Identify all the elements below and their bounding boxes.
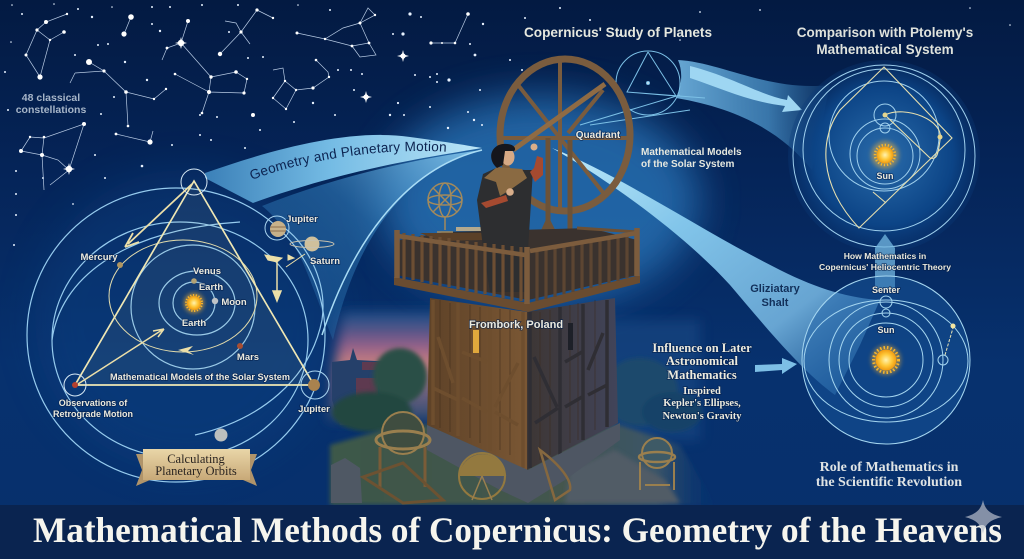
planet Jupiter lower right (308, 379, 320, 391)
planet Mercury (117, 262, 123, 268)
text: influence on later mathematics: Mathematics (667, 368, 737, 382)
armillary left (363, 412, 443, 503)
label retrograde: Retrograde Motion (53, 409, 133, 419)
tower right wall (527, 298, 618, 470)
heading: Copernicus' Study of Planets: Copernicus' Study of Planets (524, 25, 712, 40)
label: Quadrant: Quadrant (576, 130, 621, 141)
sun (871, 141, 899, 169)
label models: Mathematical Models of the Solar System (110, 372, 290, 382)
arrow downward (273, 262, 281, 301)
balcony platform (394, 275, 640, 312)
small star planet (950, 324, 956, 328)
diagram: role of mathematics (802, 276, 970, 444)
disc glow (788, 60, 980, 252)
small geometry circle near top (580, 51, 705, 125)
text: inspired Kepler and Newton: Inspired (683, 386, 721, 397)
heading: role of mathematics: the Scientific Revolution (816, 475, 962, 490)
collar (484, 167, 527, 196)
robe (477, 168, 533, 292)
beam: wide fan to left diagram (262, 150, 482, 340)
brass quadrant (459, 453, 505, 500)
label Mercury: Mercury (81, 252, 118, 263)
gravel path (565, 450, 680, 503)
astronomer figure (477, 144, 543, 292)
vertex ring right (301, 371, 329, 399)
triangle (75, 181, 314, 385)
sparkle icon (965, 500, 1002, 534)
tower (394, 227, 640, 503)
background stars (4, 3, 1011, 246)
title text: Mathematical Methods of Copernicus: Geometry of the Heavens (33, 510, 1002, 550)
text: inspired Kepler and Newton: Newton's Gravity (662, 411, 742, 422)
arrow on yellow orbit (178, 346, 194, 355)
orbits (27, 188, 325, 482)
yellow orbit (109, 240, 257, 352)
heading: comparison with Ptolemy: Mathematical System (816, 42, 954, 57)
label: 48 classical constellations: constellations (16, 104, 86, 116)
triangle instrument (540, 450, 570, 500)
small yellow marks (265, 254, 305, 267)
armillary sphere on balcony (428, 183, 462, 232)
label: Mathematical Models of the Solar System: of the Solar System (641, 159, 734, 170)
planet Mars (237, 343, 243, 349)
heading: Gliziatary Shalt: Shalt (762, 297, 789, 309)
banner: calculating planetary orbits (136, 449, 257, 486)
planet Jupiter (265, 216, 289, 240)
hand low (506, 188, 514, 196)
ground instruments (363, 412, 675, 503)
beam: geometry and planetary motion (205, 134, 482, 203)
heading: role of mathematics: Role of Mathematics in (820, 460, 958, 475)
text: how mathematics: Copernicus' Heliocentric Theory (819, 262, 951, 272)
scroll on table (456, 227, 482, 231)
banner: calculating planetary orbits: Planetary Orbits (155, 464, 237, 478)
label Venus: Venus (193, 266, 221, 277)
glow behind the observatory (380, 95, 700, 305)
disc glow (802, 276, 970, 444)
vertex ring top (181, 169, 207, 195)
arrow up into Ptolemy diagram (875, 234, 895, 290)
label: 48 classical constellations: 48 classical (22, 92, 80, 104)
heading: comparison with Ptolemy: Comparison with Ptolemy's (797, 25, 973, 40)
constellation bright stars (19, 8, 470, 175)
label Moon: Moon (221, 297, 247, 308)
tower left wall (427, 298, 527, 470)
timber frame left (433, 300, 523, 468)
label Earth 1: Earth (199, 282, 223, 293)
quadrant wheel (500, 59, 630, 248)
hand raised (530, 144, 538, 150)
balcony floor interior (396, 228, 637, 300)
sun (184, 293, 204, 313)
label senter: Senter (872, 285, 901, 295)
constellation lines (21, 8, 468, 190)
planet Moon (212, 298, 218, 304)
arrow from left vertex (78, 329, 164, 384)
label sun: Sun (876, 171, 894, 181)
label retrograde: Observations of (59, 398, 127, 408)
balcony railing (397, 228, 637, 304)
label Jupiter: Jupiter (286, 214, 318, 225)
curved heading: Geometry and Planetary Motion (250, 141, 446, 179)
arrow to role diagram (755, 358, 797, 374)
label sun: Sun (878, 325, 894, 335)
lower grey planet (214, 428, 228, 442)
heading: Gliziatary Shalt: Gliziatary (750, 283, 800, 295)
title bar (0, 505, 1024, 559)
orbits (793, 65, 975, 247)
text: influence on later mathematics: Influence on Later (652, 341, 752, 355)
glowing window (473, 330, 479, 353)
back railing (577, 228, 637, 232)
beam: to Ptolemy diagram (676, 60, 830, 170)
labels (53, 214, 340, 419)
sleeve raised (530, 156, 543, 182)
text: inspired Kepler and Newton: Kepler's Ellipses, (663, 398, 741, 409)
arrow from apex to Mercury (125, 184, 192, 247)
observation point (72, 382, 78, 388)
label: Frombork, Poland: Frombork, Poland (469, 319, 563, 331)
text: influence on later mathematics: Astronomical (666, 354, 739, 368)
sleeve low (481, 195, 508, 208)
study table (420, 233, 483, 241)
plank lines (440, 300, 595, 460)
planet Venus (191, 278, 197, 284)
label: Mathematical Models of the Solar System: Mathematical Models (641, 147, 742, 158)
ground around the tower (330, 425, 715, 505)
label Jupiter lower: Jupiter (298, 404, 330, 415)
arrow: into Ptolemy diagram (690, 66, 802, 112)
vertex ring left (64, 374, 86, 396)
beam: to scientific revolution diagram (552, 148, 880, 395)
geometric square (826, 67, 952, 228)
hair (491, 144, 515, 168)
globe right (639, 438, 675, 490)
diagram: triangle and orbits (27, 169, 340, 482)
stone base (427, 423, 620, 503)
dark window (568, 323, 573, 350)
stone wall fragment (331, 458, 362, 503)
orbits (802, 276, 970, 444)
label Mars: Mars (237, 352, 259, 363)
text: how mathematics: How Mathematics in (844, 251, 926, 261)
label Earth 2: Earth (182, 318, 206, 329)
label Saturn: Saturn (310, 256, 340, 267)
dusk landscape behind the tower (328, 312, 702, 440)
diagram: Ptolemy comparison (788, 60, 980, 252)
face (502, 148, 514, 166)
planet Saturn (290, 236, 334, 252)
telescope (513, 84, 605, 150)
timber frame right (530, 300, 607, 468)
sun (871, 345, 901, 375)
banner: calculating planetary orbits: Calculating (167, 452, 226, 466)
